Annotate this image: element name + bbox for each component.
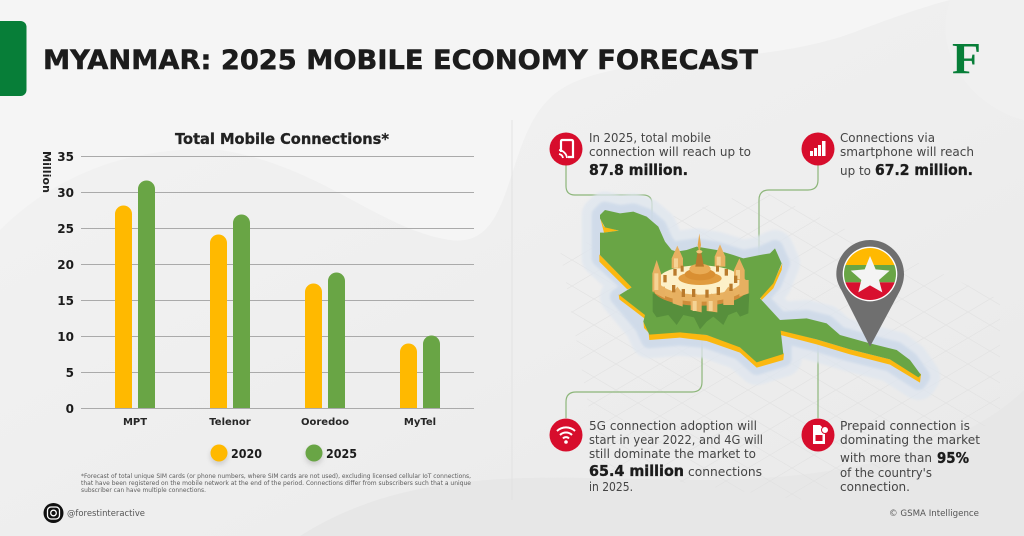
map halo <box>600 210 922 382</box>
callout: smartphone connections: smartphone will reach <box>840 144 974 159</box>
chart: total mobile connections <box>40 130 474 428</box>
callout: total connections: 87.8 million. <box>589 161 688 179</box>
legend: 2025 <box>326 447 357 461</box>
icon: instagram <box>44 503 64 523</box>
pagoda shadow <box>653 293 749 329</box>
axis label: Million <box>40 151 52 193</box>
y axis and grid: 0 <box>66 402 74 416</box>
icon: wifi <box>550 418 582 452</box>
footnote: *Forecast of total unique SIM cards (or phone numbers, where SIM cards are not used), excluding licensed cellular IoT connections, <box>81 473 471 480</box>
title: MYANMAR: 2025 MOBILE ECONOMY FORECAST <box>43 45 759 76</box>
callout: 5G and 4G: still dominate the market to <box>589 446 756 461</box>
chart title: Total Mobile Connections* <box>175 130 389 148</box>
y axis and grid: 35 <box>57 150 74 164</box>
callout: prepaid: 95% <box>937 449 969 467</box>
callout: smartphone connections: up to <box>840 163 871 178</box>
map top: green land <box>600 210 921 377</box>
callout: 5G and 4G: 65.4 million <box>589 462 684 480</box>
footnote: that have been registered on the mobile network at the end of the period. Connections differ from subscribers such that a unique <box>81 480 471 487</box>
icon: SIM card <box>802 418 834 452</box>
bars: MyTel <box>400 336 440 428</box>
bars: Ooredoo <box>301 272 349 428</box>
bars: Telenor <box>209 214 251 428</box>
bars: MyTel: MyTel <box>404 417 436 428</box>
icon: signal bars <box>802 132 834 166</box>
y axis and grid: 5 <box>66 366 74 380</box>
footnote: subscriber can have multiple connections. <box>81 487 206 494</box>
callout: total connections: connection will reach up to <box>589 144 751 159</box>
callout: total connections: In 2025, total mobile <box>589 130 711 145</box>
y axis and grid: 15 <box>57 294 74 308</box>
callout: prepaid: dominating the market <box>840 432 980 447</box>
legend: 2020 <box>231 447 262 461</box>
source credit: © GSMA Intelligence <box>889 509 979 519</box>
footnote <box>81 473 471 494</box>
bars: MPT <box>115 180 155 428</box>
callout: 5G and 4G: start in year 2022, and 4G will <box>589 432 763 447</box>
instagram handle: @forestinteractive <box>67 509 145 519</box>
callout: prepaid <box>802 418 980 494</box>
callout: prepaid: Prepaid connection is <box>840 418 970 433</box>
callout: smartphone connections: Connections via <box>840 130 935 145</box>
callout: 5G and 4G: in 2025. <box>589 479 633 494</box>
bars: MPT: MPT <box>123 417 147 428</box>
icon: phone signal <box>550 132 582 166</box>
y axis and grid: 30 <box>57 186 74 200</box>
y axis and grid: 25 <box>57 222 74 236</box>
instagram handle <box>44 503 145 523</box>
callout: 5G and 4G: connections <box>688 464 762 479</box>
platform <box>653 271 747 306</box>
callout: 5G and 4G: 5G connection adoption will <box>589 418 757 433</box>
y axis and grid: 10 <box>57 330 74 344</box>
logo: F: F <box>952 34 981 83</box>
pagoda <box>652 233 749 312</box>
bars: Ooredoo: Ooredoo <box>301 417 349 428</box>
surrounding towers <box>652 244 749 312</box>
callout: prepaid: with more than <box>840 450 932 465</box>
callout: smartphone connections: 67.2 million. <box>875 161 973 179</box>
central stupa <box>678 272 722 285</box>
callout: prepaid: of the country's <box>840 465 932 480</box>
map of Myanmar <box>599 210 922 383</box>
connector lines <box>566 165 818 418</box>
callout: total connections <box>550 130 751 179</box>
legend <box>210 444 357 465</box>
header tab <box>0 21 26 96</box>
bars: Telenor: Telenor <box>209 417 251 428</box>
callout: smartphone connections <box>802 130 974 179</box>
location pin with flag <box>836 240 904 347</box>
callout: prepaid: connection. <box>840 479 910 494</box>
callout: 5G and 4G <box>550 418 763 494</box>
y axis and grid <box>57 150 474 416</box>
map side: yellow edge <box>599 217 921 383</box>
y axis and grid: 20 <box>57 258 74 272</box>
